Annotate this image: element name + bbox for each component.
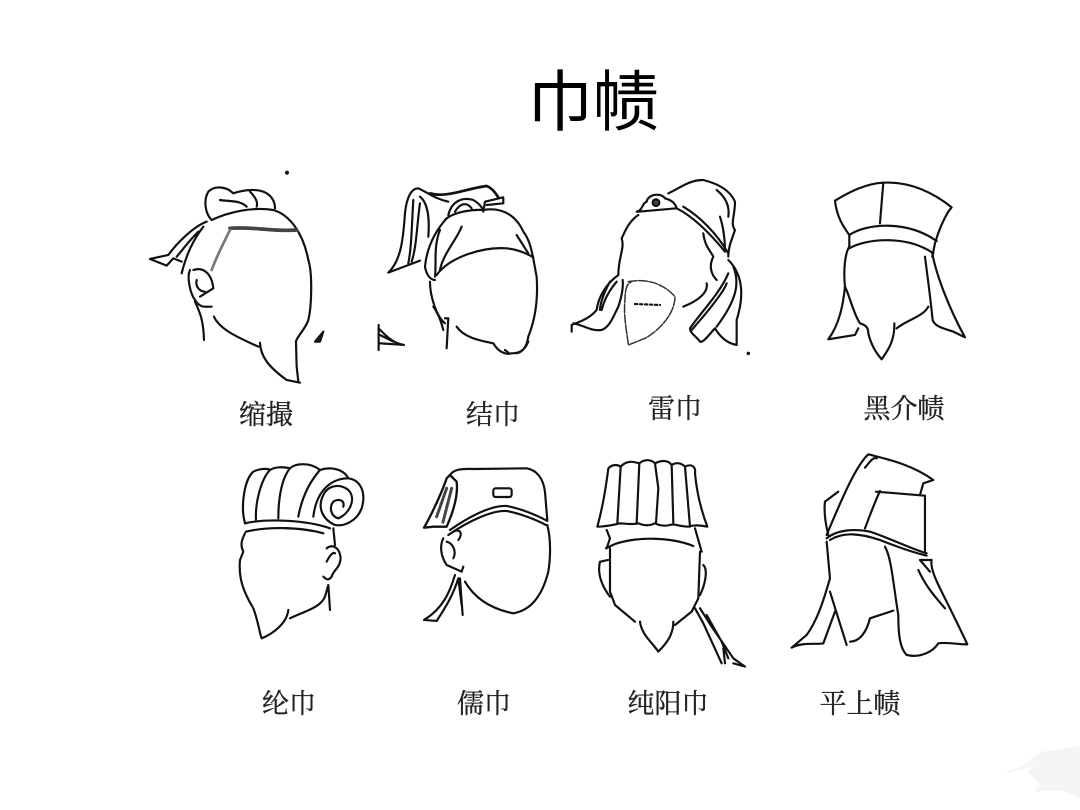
label: 儒巾: 儒巾	[457, 689, 511, 719]
label: 黑介帻: 黑介帻	[864, 394, 944, 424]
figure: 平上帻	[792, 454, 967, 656]
title: 巾帻	[527, 65, 659, 139]
label: 纶巾: 纶巾	[262, 689, 316, 719]
figure: 纯阳巾	[597, 460, 745, 667]
label: 雷巾: 雷巾	[648, 394, 702, 424]
figure: 黑介帻	[828, 183, 965, 359]
figure: 儒巾	[424, 468, 550, 621]
figure: 缩撮	[150, 172, 323, 383]
figure: 结巾	[379, 186, 537, 354]
label: 平上帻: 平上帻	[820, 689, 900, 719]
label: 缩撮: 缩撮	[239, 400, 293, 430]
label: 结巾: 结巾	[466, 400, 520, 430]
label: 纯阳巾: 纯阳巾	[628, 689, 708, 719]
figure: 纶巾	[240, 464, 363, 638]
figure: 雷巾	[572, 180, 749, 354]
corner decoration	[1000, 746, 1080, 798]
